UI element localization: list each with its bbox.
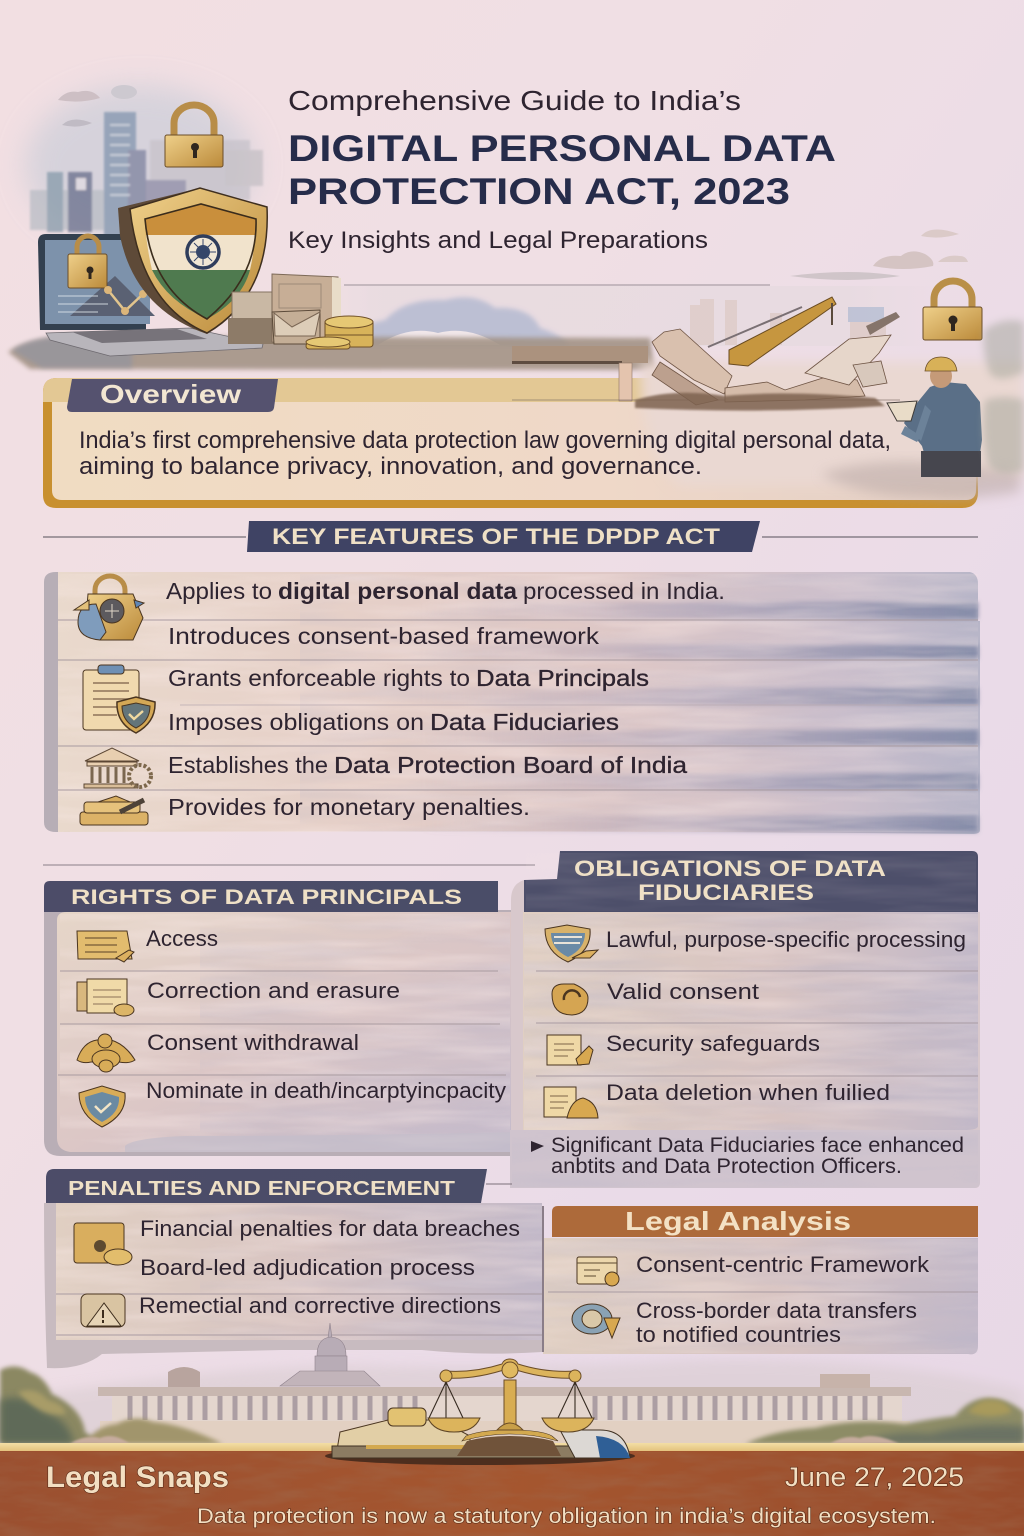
obligation: lawful processing: [545, 925, 966, 962]
obligation: security safeguards: Security safeguards: [606, 1031, 820, 1056]
padlock: top: [165, 105, 223, 167]
analysis: cross-border: Cross-border data transfers: [636, 1298, 917, 1323]
icon: scales of justice with books: [325, 1359, 635, 1465]
title block: [288, 85, 836, 254]
analysis: cross-border: [572, 1298, 917, 1347]
feature row 1: processed in India.: [523, 578, 725, 604]
penalty: remedial: Remectial and corrective directions: [139, 1293, 501, 1318]
documents and coins: [228, 274, 373, 349]
footer brand: Legal Snaps: [46, 1461, 229, 1494]
icon: money and gavel: [80, 796, 148, 825]
feature row 5: [168, 752, 687, 778]
worker with tablet: [887, 357, 982, 477]
panel: legal analysis: [542, 1206, 978, 1354]
right: access: [77, 926, 218, 962]
footer: [0, 1359, 1024, 1536]
right: correction and erasure: [77, 978, 400, 1016]
right: nominate: Nominate in death/incarptyincpacity: [146, 1078, 506, 1103]
analysis: consent-centric: Consent-centric Framework: [636, 1252, 930, 1277]
feature row 5: Data Protection Board of India: [334, 752, 687, 778]
panel: penalties and enforcement: [44, 1169, 542, 1368]
panel: rights of data principals: [44, 881, 512, 1156]
panel: key features: [44, 572, 980, 834]
obligation: valid consent: Valid consent: [607, 979, 759, 1004]
foliage behind padlock: [983, 320, 1024, 473]
heading: obligations: FIDUCIARIES: [638, 880, 814, 905]
construction scene: bridge, crane, rubble, worker: [512, 281, 1024, 499]
analysis: cross-border: to notified countries: [636, 1322, 841, 1347]
icon: courthouse with seal: [84, 748, 151, 788]
overview text: [79, 427, 891, 480]
dome: [280, 1323, 380, 1386]
obligation: valid consent: [552, 979, 759, 1015]
feature row 1: [166, 578, 725, 604]
obligation: security safeguards: [547, 1031, 820, 1065]
title: main heading: DIGITAL PERSONAL DATA: [288, 128, 836, 169]
padlock: right: [923, 281, 982, 340]
heading: rights: RIGHTS OF DATA PRINCIPALS: [71, 886, 462, 909]
heading: penalties: [46, 1169, 487, 1203]
padlock: on laptop: [68, 236, 147, 315]
note: significant data fiduciaries: [531, 1134, 964, 1178]
obligation: data deletion: Data deletion when fuilied: [606, 1080, 890, 1105]
trees right: [745, 1398, 1024, 1444]
icon: padlock with globe: [74, 576, 144, 640]
obligation: lawful processing: Lawful, purpose-specific processing: [606, 927, 966, 952]
feature row 6: Provides for monetary penalties.: [168, 794, 530, 820]
overview text: India’s first comprehensive data protection law governing digital personal data,: [79, 427, 891, 454]
heading tab: overview: Overview: [100, 379, 242, 409]
icon: clipboard with shield: [83, 665, 155, 733]
heading: obligations: OBLIGATIONS OF DATA: [574, 856, 886, 881]
note: significant data fiduciaries: Significant Data Fiduciaries face enhanced: [551, 1134, 964, 1157]
overview panel: [43, 362, 1024, 508]
right: correction and erasure: Correction and erasure: [147, 978, 400, 1003]
trees left: [0, 1366, 223, 1444]
title: main heading: [288, 128, 836, 212]
city skyline: [25, 85, 263, 245]
feature row 3: [168, 665, 649, 691]
colonnade building: [98, 1367, 911, 1444]
laptop: [38, 234, 263, 356]
rubble: [635, 312, 900, 411]
clouds and distant skyline, right: [690, 229, 968, 345]
ground wash: [8, 336, 655, 370]
right: consent withdrawal: [77, 1030, 359, 1072]
overview text: aiming to balance privacy, innovation, and governance.: [79, 453, 702, 480]
panel: obligations of data fiduciaries: [510, 851, 980, 1188]
feature row 3: Data Principals: [476, 665, 649, 691]
feature row 4: Imposes obligations on: [168, 709, 424, 735]
note: significant data fiduciaries: anbtits and Data Protection Officers.: [551, 1155, 902, 1178]
heading tab: overview: [67, 379, 278, 412]
analysis: consent-centric: [577, 1252, 930, 1286]
penalty: remedial: [81, 1293, 501, 1327]
crane: [708, 297, 836, 366]
penalty: financial: [74, 1216, 520, 1265]
subtitle: Key Insights and Legal Preparations: [288, 227, 708, 254]
right: access: Access: [146, 926, 218, 951]
penalty: adjudication: Board-led adjudication process: [140, 1255, 475, 1280]
heading: key features: KEY FEATURES OF THE DPDP ACT: [272, 524, 721, 549]
feature row 1: Applies to: [166, 578, 272, 604]
feature row 1: digital personal data: [278, 578, 517, 604]
footer date: June 27, 2025: [785, 1462, 964, 1492]
parliament scene: [0, 1323, 1024, 1450]
penalty: financial: Financial penalties for data breaches: [140, 1216, 520, 1241]
title: main heading: PROTECTION ACT, 2023: [288, 171, 790, 212]
heading: key features: [43, 521, 978, 552]
heading: legal analysis: Legal Analysis: [625, 1206, 851, 1236]
shield with Indian flag: [118, 188, 267, 334]
obligation: data deletion: [544, 1080, 890, 1118]
title: kicker: Comprehensive Guide to India’s: [288, 85, 741, 116]
horizon wash: [320, 286, 940, 346]
panel: overview body: [43, 378, 978, 508]
footer tagline: Data protection is now a statutory obligation in india’s digital ecosystem.: [197, 1505, 936, 1528]
distant clouds: [345, 297, 570, 346]
bridge: [512, 346, 900, 401]
feature row 2: Introduces consent-based framework: [168, 623, 600, 649]
feature row 4: [168, 709, 619, 735]
heading: legal analysis: [552, 1206, 978, 1237]
feature row 4: Data Fiduciaries: [430, 709, 619, 735]
heading: penalties: PENALTIES AND ENFORCEMENT: [68, 1178, 455, 1200]
right: nominate: [79, 1078, 506, 1127]
row backgrounds: [58, 572, 980, 834]
heading: obligations: [524, 851, 978, 912]
ground wash over panel: [640, 362, 1024, 486]
heading: rights: [44, 881, 498, 912]
feature row 5: Establishes the: [168, 752, 328, 778]
header illustration: city, shield, laptop: [8, 85, 940, 370]
right: consent withdrawal: Consent withdrawal: [147, 1030, 359, 1055]
feature row 3: Grants enforceable rights to: [168, 665, 470, 691]
